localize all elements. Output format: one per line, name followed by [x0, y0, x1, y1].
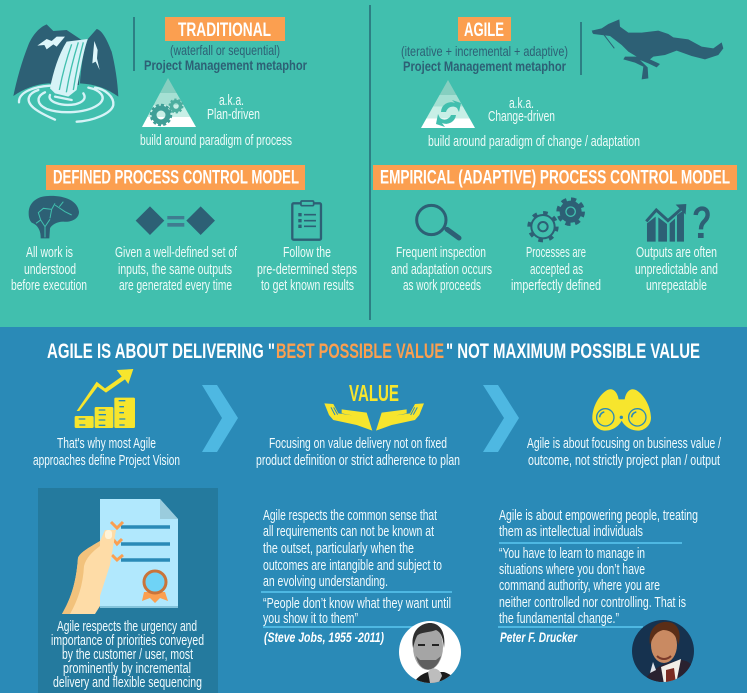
heading: agile — [458, 17, 511, 41]
heading: defined process: DEFINED PROCESS CONTROL MODEL — [53, 168, 299, 188]
quote: peter drucker — [499, 546, 686, 627]
center divider — [369, 5, 371, 320]
icon: magnifier — [417, 205, 459, 238]
text: aka change-driven: a.k.a. — [509, 96, 534, 112]
text: common sense: the outset, particularly when the — [263, 541, 414, 557]
icon: hand holding document — [62, 499, 178, 614]
panel: agile — [401, 17, 723, 150]
text: aka plan-driven: a.k.a. — [219, 93, 244, 109]
icon: open hands — [324, 403, 424, 431]
text: Follow the — [283, 245, 331, 261]
icon: pyramid with cycle arrows — [421, 80, 475, 128]
text: aka plan-driven — [207, 93, 260, 123]
subtitle: iterative: (iterative + incremental + adaptive) — [401, 43, 568, 59]
icon: chart and question mark — [646, 204, 708, 242]
quote: steve jobs: “People don’t know what they want until — [263, 596, 451, 612]
text — [635, 245, 718, 294]
item: value delivery — [256, 380, 460, 469]
text: aka change-driven: Change-driven — [488, 109, 555, 125]
text: are generated every time — [119, 278, 232, 294]
quote: steve jobs — [263, 596, 451, 627]
text — [115, 245, 238, 294]
quote: peter drucker: situations where you don’t have — [499, 562, 645, 578]
text: product definition or strict adherence to plan — [256, 453, 460, 469]
text: common sense: Agile respects the common sense that — [263, 508, 437, 524]
text: common sense: outcomes are intangible and subject to — [263, 558, 442, 574]
text — [51, 619, 204, 691]
headline: best possible value: BEST POSSIBLE VALUE — [276, 340, 444, 363]
icon: waterfall — [13, 24, 118, 122]
text — [257, 245, 357, 294]
quote: peter drucker: command authority, where you are — [499, 578, 660, 594]
text: Processes are — [526, 245, 586, 261]
text — [527, 436, 722, 469]
label: metaphor: Project Management metaphor — [403, 58, 566, 74]
item: processes imperfect — [511, 200, 601, 294]
item: frequent inspection — [391, 205, 492, 294]
icon: running fox — [592, 19, 723, 79]
icon: gears — [529, 200, 583, 241]
quote: peter drucker: “You have to learn to manage in — [499, 546, 645, 562]
panel: urgency and priorities — [38, 488, 218, 693]
heading: agile: AGILE — [464, 20, 504, 41]
subtitle: waterfall: (waterfall or sequential) — [170, 42, 280, 58]
text: Given a well-defined set of — [115, 245, 238, 261]
panel: traditional — [13, 17, 307, 149]
icon: clipboard — [292, 201, 321, 240]
panel: empirical process control model — [373, 165, 737, 294]
text: empowering: them as intellectual individuals — [499, 524, 643, 540]
attribution: steve jobs: (Steve Jobs, 1955 -2011) — [264, 629, 384, 645]
text: empowering — [499, 508, 698, 540]
text: Outputs are often — [636, 245, 717, 261]
text: before execution — [11, 278, 87, 294]
divider — [580, 22, 582, 75]
item: business value — [527, 389, 722, 469]
panel: blue value background — [0, 327, 747, 693]
text: aka change-driven — [488, 96, 555, 125]
text: paradigm of process: build around paradigm of process — [140, 133, 292, 149]
text: imperfectly defined — [511, 278, 601, 294]
text: aka plan-driven: Plan-driven — [207, 107, 260, 123]
heading: traditional: TRADITIONAL — [178, 20, 271, 41]
text — [11, 245, 87, 294]
text: All work is — [26, 245, 73, 261]
text: accepted as — [530, 262, 583, 278]
text: common sense — [263, 508, 442, 590]
text: pre-determined steps — [257, 262, 357, 278]
text: prominently by incremental — [63, 661, 191, 677]
text — [391, 245, 492, 294]
item: follow steps — [257, 201, 357, 294]
text: approaches define Project Vision — [33, 453, 180, 469]
text: Focusing on value delivery not on fixed — [269, 436, 447, 452]
text — [511, 245, 601, 294]
label: metaphor: Project Management metaphor — [144, 57, 307, 73]
text: to get known results — [261, 278, 354, 294]
attribution: peter drucker: Peter F. Drucker — [500, 629, 578, 645]
icon: diamonds equal — [136, 206, 215, 235]
item: all work understood — [11, 196, 87, 294]
icon: rising coins — [75, 369, 135, 428]
text: as work proceeds — [403, 278, 481, 294]
text: common sense: an evolving understanding. — [263, 574, 388, 590]
text: importance of priorities conveyed — [51, 633, 204, 649]
text: common sense: all requirements can not be known at — [263, 524, 434, 540]
heading: traditional — [165, 17, 285, 41]
photo: peter drucker — [632, 620, 694, 682]
item: outputs unpredictable — [635, 204, 718, 294]
text: That's why most Agile — [57, 436, 156, 452]
text: Agile respects the urgency and — [57, 619, 197, 635]
text: inputs, the same outputs — [118, 262, 232, 278]
icon: binoculars — [592, 389, 651, 431]
text: understood — [24, 262, 76, 278]
text — [33, 436, 180, 469]
headline: best possible value — [47, 340, 700, 363]
photo: steve jobs — [399, 621, 461, 683]
heading: value: VALUE — [349, 380, 399, 406]
text: and adaptation occurs — [391, 262, 492, 278]
panel: empowering people quote — [498, 508, 698, 690]
panel: common sense quote — [261, 508, 461, 690]
text — [256, 436, 460, 469]
item: project vision — [33, 369, 180, 469]
icon: pyramid with gears — [142, 78, 196, 127]
heading: defined process — [46, 165, 305, 190]
item: same outputs — [115, 206, 238, 294]
text: delivery and flexible sequencing — [53, 675, 202, 691]
panel: defined process control model — [11, 165, 357, 294]
text: by the customer / user, most — [62, 647, 193, 663]
text: Frequent inspection — [396, 245, 486, 261]
headline: best possible value: AGILE IS ABOUT DELIVERING " — [47, 340, 275, 363]
quote: peter drucker: the fundamental change.” — [499, 611, 619, 627]
panel: teal comparison background — [0, 0, 747, 327]
quote: steve jobs: you show it to them” — [263, 611, 358, 627]
arrow: chevron one — [202, 385, 238, 452]
text: unpredictable and — [635, 262, 718, 278]
divider — [133, 17, 135, 71]
arrow: chevron two — [483, 385, 519, 452]
text: unrepeatable — [646, 278, 707, 294]
text: paradigm of change: build around paradigm of change / adaptation — [428, 134, 640, 150]
icon: brain — [29, 196, 79, 238]
